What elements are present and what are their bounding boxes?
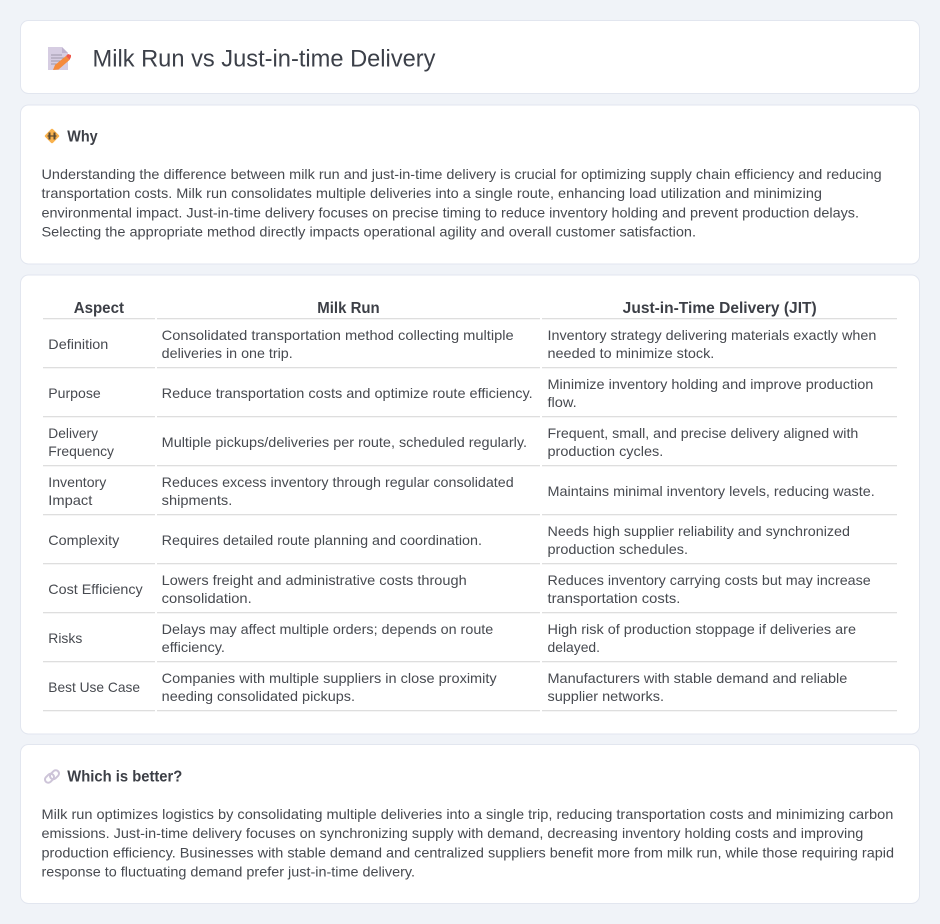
row: delivery frequency: Delivery (48, 425, 98, 441)
row: cost efficiency: consolidation. (162, 590, 252, 606)
row: inventory impact: Impact (48, 492, 92, 508)
row: delivery frequency: Frequent, small, and precise delivery aligned with (548, 425, 858, 441)
why paragraph: Understanding the difference between milk run and just-in-time delivery is crucial for optimizing supply chain efficiency and reducing (42, 166, 882, 182)
which is better paragraph: emissions. Just-in-time delivery focuses on synchronizing supply with demand, decreasing inventory holding costs and improving (42, 825, 863, 841)
row: risks: Risks (48, 630, 82, 646)
icon: warning diamond (44, 128, 60, 144)
which is better paragraph: Milk run optimizes logistics by consolidating multiple deliveries into a single trip, reducing transportation costs and minimizing carbon (42, 806, 893, 822)
row: definition (48, 327, 876, 361)
row: cost efficiency: Cost Efficiency (48, 581, 143, 597)
row: best use case: supplier networks. (548, 688, 664, 704)
row: risks: delayed. (548, 639, 600, 655)
row: delivery frequency: Frequency (48, 443, 114, 459)
row: inventory impact: Reduces excess inventory through regular consolidated (162, 474, 514, 490)
panel: comparison table (20, 275, 920, 734)
row: best use case: Best Use Case (48, 679, 140, 695)
row: inventory impact: Maintains minimal inventory levels, reducing waste. (548, 483, 875, 499)
panel: why (20, 105, 920, 264)
row: delivery frequency: Multiple pickups/deliveries per route, scheduled regularly. (162, 434, 527, 450)
title: Milk Run vs Just-in-time Delivery (92, 46, 436, 72)
which is better paragraph: production efficiency. Businesses with stable demand and centralized suppliers benefit more from milk run, while those requiring rapid (42, 844, 894, 860)
row: cost efficiency (48, 572, 871, 606)
which is better paragraph: response to fluctuating demand prefer just-in-time delivery. (42, 864, 415, 880)
row: cost efficiency: Reduces inventory carrying costs but may increase (548, 572, 871, 588)
row: best use case (48, 670, 848, 704)
row: risks: Delays may affect multiple orders; depends on route (162, 621, 494, 637)
row: delivery frequency: production cycles. (548, 443, 663, 459)
row: definition: Inventory strategy delivering materials exactly when (548, 327, 876, 343)
row: purpose: Reduce transportation costs and optimize route efficiency. (162, 385, 533, 401)
why paragraph: transportation costs. Milk run consolidates multiple deliveries into a single route, enhancing load utilization and minimizing (42, 185, 822, 201)
which is better paragraph (42, 806, 894, 880)
icon: memo and pencil (48, 47, 71, 70)
row: delivery frequency (48, 425, 858, 459)
row: best use case: needing consolidated pickups. (162, 688, 355, 704)
row: inventory impact: Inventory (48, 474, 106, 490)
table header row: Milk Run (317, 300, 380, 317)
row: inventory impact (48, 474, 875, 508)
heading: which is better: Which is better? (67, 769, 182, 786)
row: best use case: Manufacturers with stable demand and reliable (548, 670, 848, 686)
row: purpose (48, 376, 873, 410)
row: complexity: Needs high supplier reliability and synchronized (548, 523, 850, 539)
row: purpose: Minimize inventory holding and improve production (548, 376, 873, 392)
row: cost efficiency: transportation costs. (548, 590, 680, 606)
row: purpose: Purpose (48, 385, 101, 401)
panel: title header (20, 20, 920, 94)
row: complexity: production schedules. (548, 541, 688, 557)
row: complexity: Complexity (48, 532, 119, 548)
table header row: Aspect (74, 300, 124, 317)
row: inventory impact: shipments. (162, 492, 232, 508)
row: definition: Consolidated transportation method collecting multiple (162, 327, 514, 343)
row: risks: efficiency. (162, 639, 225, 655)
row: complexity (48, 523, 850, 557)
heading: why: Why (67, 129, 98, 146)
row: definition: Definition (48, 336, 108, 352)
row: purpose: flow. (548, 394, 577, 410)
why paragraph (42, 166, 882, 240)
icon: chain link (44, 769, 60, 784)
row: definition: deliveries in one trip. (162, 345, 293, 361)
row: risks (48, 621, 856, 655)
row: cost efficiency: Lowers freight and administrative costs through (162, 572, 467, 588)
why paragraph: environmental impact. Just-in-time delivery focuses on precise timing to reduce inventory holding and prevent production delays. (42, 204, 859, 220)
row: risks: High risk of production stoppage if deliveries are (548, 621, 856, 637)
table header row (74, 300, 817, 317)
row: definition: needed to minimize stock. (548, 345, 714, 361)
row: best use case: Companies with multiple suppliers in close proximity (162, 670, 497, 686)
why paragraph: Selecting the appropriate method directly impacts operational agility and overall customer satisfaction. (42, 224, 696, 240)
panel: which is better (20, 744, 920, 904)
row: complexity: Requires detailed route planning and coordination. (162, 532, 482, 548)
table header row: Just-in-Time Delivery (JIT) (623, 300, 817, 317)
